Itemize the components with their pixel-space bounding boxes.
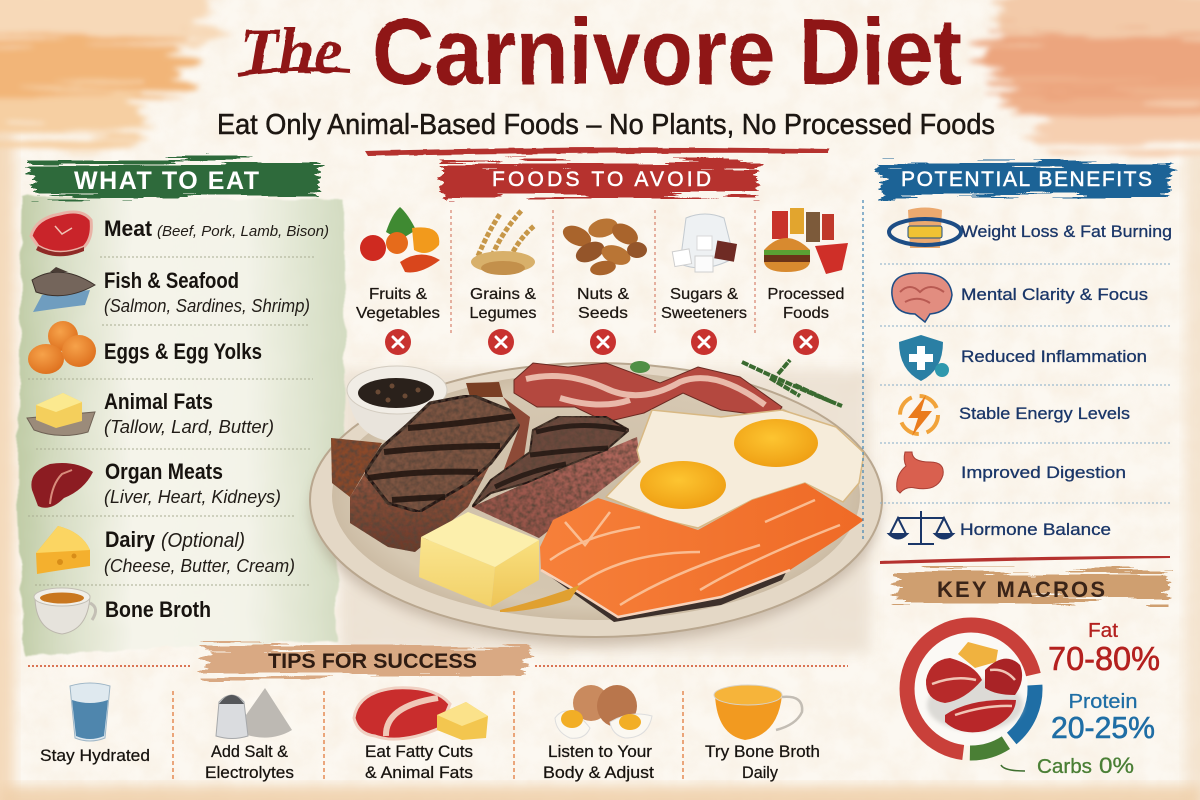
tip: salt and electrolytes: Add Salt &: [211, 742, 289, 761]
label: [661, 286, 747, 322]
heading banner: foods to avoid: [442, 163, 758, 196]
heading banner: what to eat: [30, 161, 318, 197]
label: [356, 286, 440, 322]
label: Sweeteners: [661, 305, 747, 322]
fried eggs: [606, 410, 864, 528]
heading banner: tips: [205, 646, 527, 676]
icon: processed foods: [764, 208, 848, 274]
icon: nuts and seeds: [560, 215, 647, 277]
subtitle underline stroke: [365, 147, 830, 156]
tip: salt and electrolytes: Electrolytes: [205, 763, 294, 782]
benefit: hormone balance: Hormone Balance: [960, 520, 1111, 539]
icon: grains and legumes: [471, 210, 535, 275]
item: fish: (Salmon, Sardines, Shrimp): [104, 296, 310, 316]
heading banner: key macros: [896, 572, 1168, 602]
item: organ meats: [31, 459, 281, 508]
macro: protein: Protein: [1068, 691, 1138, 713]
heading banner: potential benefits: POTENTIAL BENEFITS: [901, 168, 1152, 191]
heading banner: key macros: KEY MACROS: [937, 577, 1105, 602]
panel: foods to avoid: [356, 163, 848, 355]
benefit: weight loss: [889, 208, 1172, 248]
hero: plate of food: [310, 360, 882, 644]
tip: listen to your body: Body & Adjust: [543, 763, 654, 782]
subtitle: Eat Only Animal-Based Foods – No Plants, No Processed Foods: [217, 109, 995, 141]
item: bone broth: Bone Broth: [105, 597, 211, 622]
label: Grains &: [470, 286, 536, 303]
heading banner: foods to avoid: FOODS TO AVOID: [492, 168, 711, 191]
label: Legumes: [470, 305, 536, 322]
item: animal fats: [27, 389, 274, 437]
steak left: [350, 395, 522, 552]
tip: bone broth: [705, 685, 820, 782]
heading banner: what to eat: WHAT TO EAT: [74, 167, 259, 195]
icons: red x marks: [385, 329, 819, 355]
label: [577, 286, 629, 322]
benefit: stable energy: Stable Energy Levels: [959, 404, 1130, 423]
benefit: weight loss: Weight Loss & Fat Burning: [961, 222, 1172, 241]
macro: fat: 70-80%: [1048, 640, 1160, 677]
item: dairy: (Optional): [161, 530, 245, 552]
salmon: [540, 483, 864, 622]
butter: [419, 512, 580, 612]
panel: what to eat: [18, 161, 345, 655]
item: meat: (Beef, Pork, Lamb, Bison): [157, 223, 329, 240]
item: meat: [31, 212, 329, 256]
item: fish: Fish & Seafood: [104, 268, 239, 293]
decorative brush top left: [0, 0, 210, 138]
label: Vegetables: [356, 305, 440, 322]
item: meat: Meat: [104, 216, 153, 241]
label: Processed: [768, 286, 844, 303]
benefit: mental clarity: [892, 273, 1148, 322]
title: Carnivore Diet: [372, 0, 962, 104]
heading banner: potential benefits: [882, 163, 1170, 196]
steak right: [472, 416, 640, 538]
tip: listen to your body: Listen to Your: [548, 742, 652, 761]
donut chart: [907, 625, 1035, 753]
tip: fatty cuts: [354, 688, 488, 782]
tip: fatty cuts: & Animal Fats: [365, 763, 473, 782]
tip: bone broth: Daily: [742, 763, 778, 782]
panel: potential benefits: [863, 163, 1172, 564]
item: organ meats: Organ Meats: [105, 459, 223, 484]
tip: listen to your body: [543, 685, 654, 782]
item: fish: [32, 267, 310, 316]
bone strip: [500, 397, 530, 480]
macro: fat: [1048, 620, 1160, 677]
tip: fatty cuts: Eat Fatty Cuts: [365, 742, 473, 761]
bacon: [514, 363, 782, 422]
small meat piece: [331, 438, 382, 497]
macro: fat: Fat: [1088, 620, 1118, 642]
benefit: hormone balance: [889, 511, 1111, 544]
item: eggs: Eggs & Egg Yolks: [104, 339, 262, 364]
label: Fruits &: [369, 286, 427, 303]
benefits divider: [880, 556, 1170, 564]
item: dairy: (Cheese, Butter, Cream): [104, 556, 295, 576]
plate: [310, 363, 882, 644]
basil leaf: [630, 361, 650, 373]
item: organ meats: (Liver, Heart, Kidneys): [104, 487, 281, 507]
panel: key macros: [896, 572, 1168, 778]
benefit: improved digestion: [897, 452, 1126, 493]
item: dairy: [36, 526, 295, 576]
macro: carbs: [1001, 753, 1134, 778]
item: animal fats: (Tallow, Lard, Butter): [104, 417, 274, 437]
title: The: [240, 15, 342, 88]
benefit: stable energy: [900, 395, 1130, 436]
item: bone broth: [34, 588, 211, 634]
label: Nuts &: [577, 286, 629, 303]
benefit: improved digestion: Improved Digestion: [961, 463, 1126, 482]
item: eggs: [28, 321, 262, 374]
label: Foods: [783, 305, 829, 322]
pepper bowl: [347, 366, 447, 442]
tip: salt and electrolytes: [205, 688, 294, 782]
benefit: reduced inflammation: [899, 335, 1147, 381]
macro: protein: 20-25%: [1051, 710, 1155, 745]
label: [768, 286, 844, 322]
macro: carbs: 0%: [1099, 753, 1134, 778]
label: Sugars &: [670, 286, 738, 303]
item: animal fats: Animal Fats: [104, 389, 213, 414]
tip: stay hydrated: Stay Hydrated: [40, 746, 150, 765]
meat image in donut: [926, 642, 1023, 732]
bone top: [466, 382, 503, 397]
icon: fruits and vegetables: [360, 207, 440, 272]
decorative brush top right: [985, 0, 1200, 150]
icon: sugars and sweeteners: [672, 214, 737, 272]
label: [470, 286, 536, 322]
benefit: mental clarity: Mental Clarity & Focus: [961, 285, 1148, 304]
heading banner: tips: TIPS FOR SUCCESS: [268, 650, 477, 673]
label: Seeds: [578, 305, 628, 322]
macro: protein: [1051, 691, 1155, 745]
tip: stay hydrated: [40, 683, 150, 765]
tip: bone broth: Try Bone Broth: [705, 742, 820, 761]
panel: tips for success: [28, 646, 848, 782]
rosemary: [742, 360, 842, 406]
benefit: reduced inflammation: Reduced Inflammation: [961, 347, 1147, 366]
item: dairy: Dairy: [105, 527, 156, 552]
macro: carbs: Carbs: [1037, 756, 1092, 778]
